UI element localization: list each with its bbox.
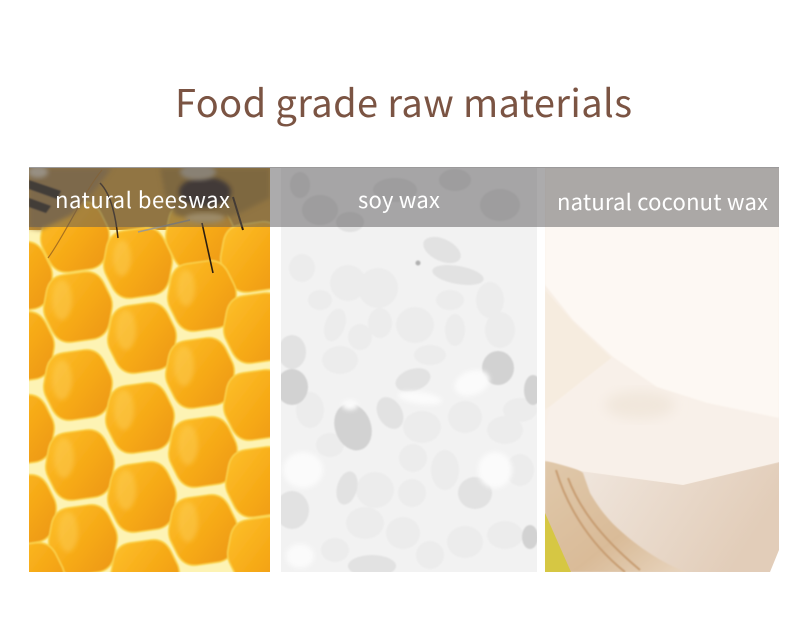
icon: bees — [28, 164, 270, 273]
coconut husk — [545, 461, 687, 572]
label: natural beeswax: natural beeswax — [55, 183, 230, 215]
wax beads — [275, 232, 542, 577]
honeycomb cells — [29, 201, 270, 572]
title: Food grade raw materials — [175, 73, 632, 128]
panel: soy wax photo — [275, 168, 542, 577]
beige shadow left — [545, 290, 611, 410]
white corner — [770, 550, 779, 572]
coconut middle slab — [547, 460, 779, 470]
coconut top lump — [546, 227, 778, 418]
beads behind the band — [338, 227, 362, 232]
panel: natural beeswax photo — [29, 168, 270, 572]
green rind — [545, 513, 571, 572]
label: soy wax: soy wax — [358, 183, 440, 215]
label band — [29, 167, 779, 227]
label: natural coconut wax: natural coconut wax — [557, 185, 768, 217]
panel: natural coconut wax photo — [545, 168, 779, 572]
cell highlights — [52, 240, 198, 552]
coconut inner flesh — [583, 462, 779, 572]
